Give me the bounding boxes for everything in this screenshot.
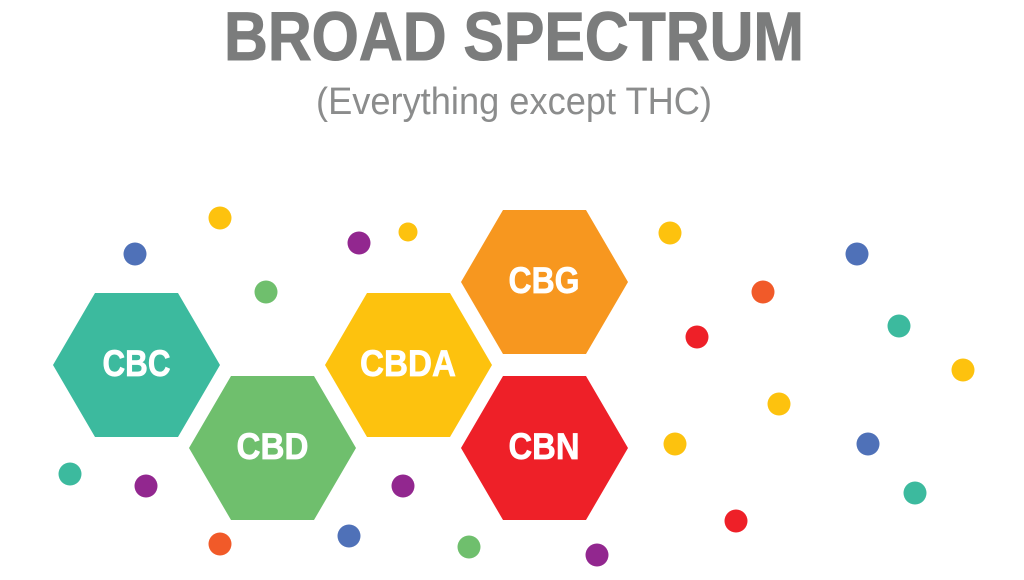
hexagon: CBC <box>53 293 220 437</box>
hexagon: CBD: CBD <box>236 426 308 467</box>
hexagon: CBDA: CBDA <box>360 343 456 384</box>
hexagon: CBN <box>461 376 628 520</box>
scattered dots <box>58 206 974 566</box>
hexagon: CBD <box>189 376 356 520</box>
hexagon: CBDA <box>325 293 492 437</box>
hexagon: CBG: CBG <box>508 260 580 301</box>
subtitle: (Everything except THC) <box>316 81 712 123</box>
title: BROAD SPECTRUM <box>224 0 804 75</box>
hexagon: CBN: CBN <box>508 426 580 467</box>
hexagon: CBG <box>461 210 628 354</box>
hexagon: CBC: CBC <box>102 343 170 384</box>
